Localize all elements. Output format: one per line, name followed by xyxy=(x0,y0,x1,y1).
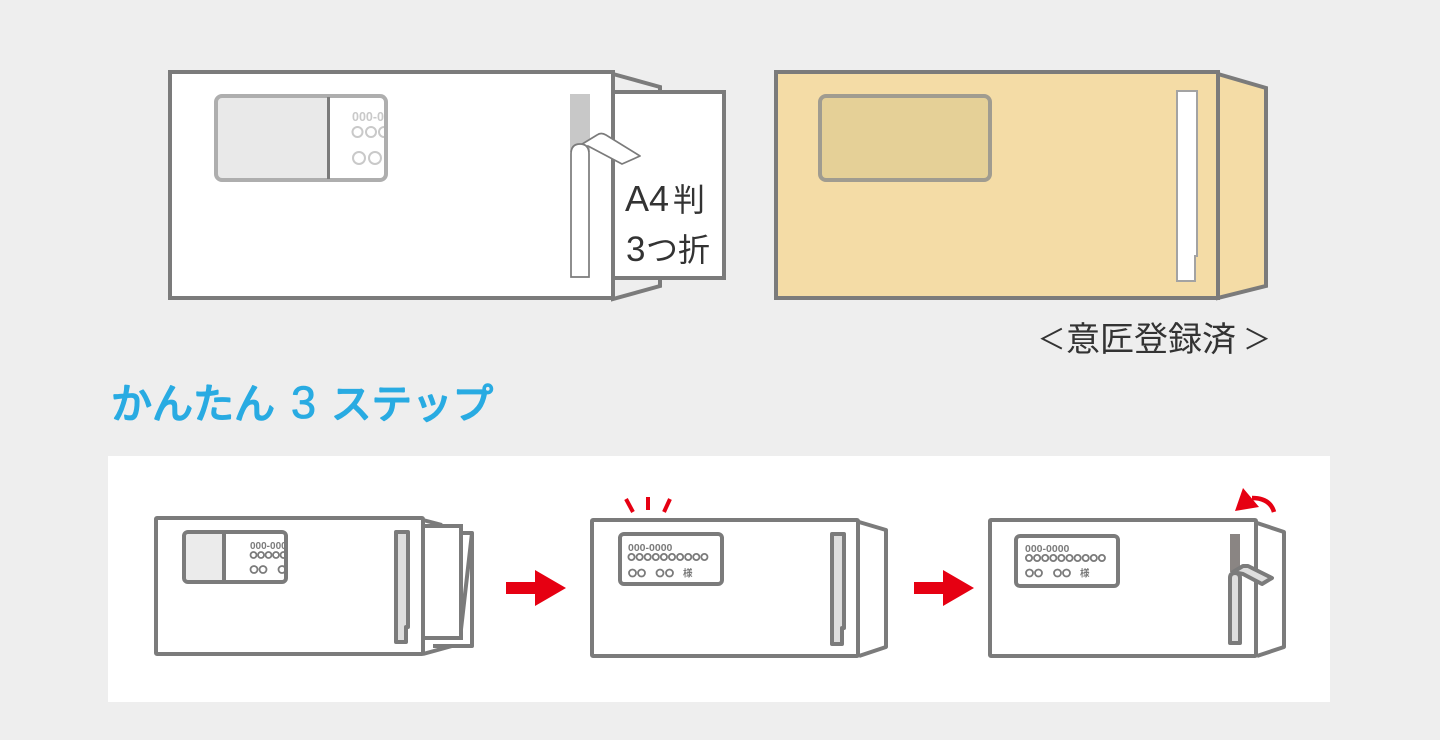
design registered note: 意匠登録済 xyxy=(1066,321,1236,359)
envelope body xyxy=(170,72,613,298)
seal strip xyxy=(832,534,844,644)
body xyxy=(776,72,1218,298)
body xyxy=(990,520,1256,656)
step 1: insert sheet xyxy=(156,518,472,654)
body xyxy=(592,520,858,656)
A4 folded sheet xyxy=(612,92,724,278)
step 3: peel and seal xyxy=(990,488,1284,656)
flap xyxy=(1218,74,1266,298)
design registered note: ＜ xyxy=(1038,324,1066,355)
seal strip xyxy=(1177,91,1197,281)
sheet label: A4 xyxy=(625,178,669,219)
seal tape peeled xyxy=(570,94,640,277)
step 2: address shown xyxy=(592,497,886,656)
heading: ステップ xyxy=(331,381,493,427)
flap xyxy=(1257,523,1284,656)
address window: 000-0000 xyxy=(352,110,405,124)
address window xyxy=(216,96,405,180)
envelope: kraft back view xyxy=(776,72,1266,298)
highlight rays xyxy=(626,497,670,512)
design registered note: ＞ xyxy=(1243,324,1271,355)
window xyxy=(820,96,990,180)
window xyxy=(1016,536,1118,586)
sheet label: 判 xyxy=(673,182,705,218)
heading: かんたん xyxy=(111,381,275,427)
arrow: step 1 to 2 xyxy=(506,570,566,606)
sheet label xyxy=(625,178,710,269)
curved red arrow xyxy=(1235,488,1274,512)
seal strip peeled xyxy=(1230,534,1272,643)
window xyxy=(184,532,293,582)
window: 様 xyxy=(1080,568,1090,580)
panel: three steps xyxy=(108,456,1330,702)
back sheet xyxy=(433,533,472,646)
envelope: white with A4 sheet inserted xyxy=(170,72,724,299)
envelope flap xyxy=(613,74,660,299)
window: 000-0000 xyxy=(250,541,293,552)
heading: 3 xyxy=(291,377,316,428)
envelope body xyxy=(156,518,423,654)
window: 000-0000 xyxy=(1025,543,1070,555)
front sheet xyxy=(421,526,461,638)
window: 000-0000 xyxy=(628,542,673,554)
window: 様 xyxy=(683,568,693,580)
window xyxy=(620,534,722,584)
arrow: step 2 to 3 xyxy=(914,570,974,606)
flap edges xyxy=(423,520,452,654)
flap xyxy=(859,522,886,656)
seal strip xyxy=(396,532,408,642)
sheet label: つ折 xyxy=(646,232,710,268)
sheet label: 3 xyxy=(626,230,645,269)
